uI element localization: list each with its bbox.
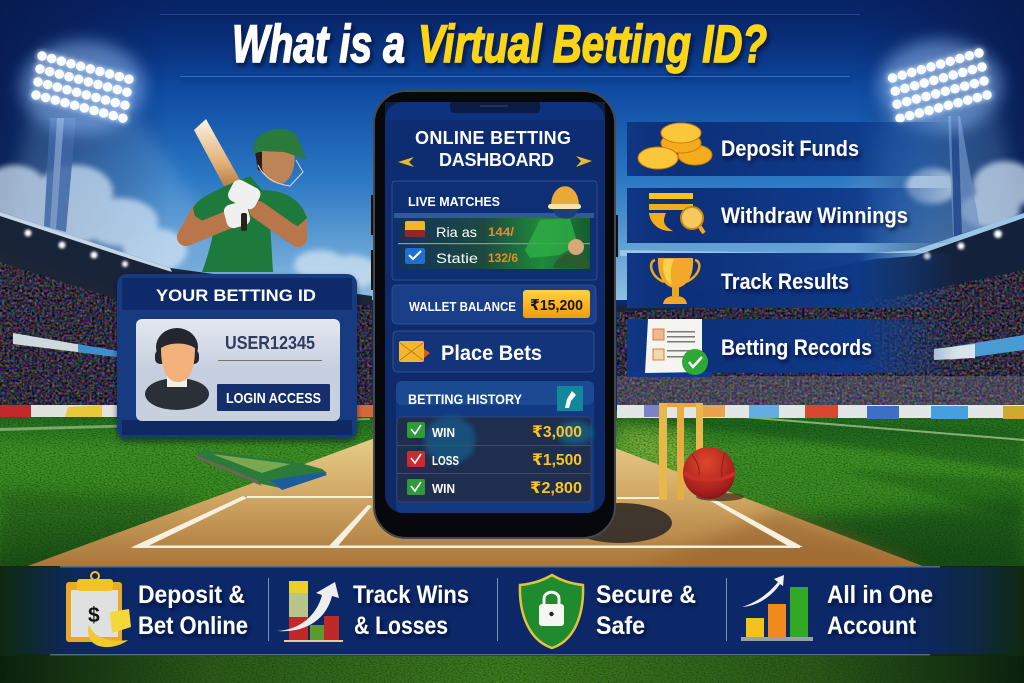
upper arms	[186, 212, 298, 238]
panel: live matches: LIVE MATCHES	[408, 194, 500, 209]
panel: betting records: Betting Records	[721, 335, 872, 360]
panel: deposit funds	[627, 122, 957, 176]
icon: clipboard	[66, 572, 131, 647]
hair	[255, 152, 268, 174]
phone shadow on pitch	[568, 503, 672, 543]
shirt	[193, 176, 307, 272]
sky background	[0, 0, 1024, 300]
icon: rupee and magnifier	[649, 193, 704, 233]
feature: secure and safe	[520, 575, 696, 648]
icon: envelope	[399, 341, 430, 362]
panel: track results	[627, 253, 957, 308]
row: win 2800	[407, 479, 582, 497]
right stand	[617, 213, 1024, 410]
helmet	[253, 129, 307, 159]
face	[262, 150, 295, 184]
panel: withdraw winnings: Withdraw Winnings	[721, 203, 908, 228]
batsman	[186, 119, 307, 272]
login button: LOGIN ACCESS	[226, 390, 321, 407]
icon: chart with arrow	[277, 581, 343, 642]
icon: player	[557, 386, 583, 411]
match rows: Statie	[436, 250, 478, 266]
bat on ground	[196, 450, 327, 490]
history table	[397, 416, 593, 502]
panel: betting history: BETTING HISTORY	[408, 391, 523, 407]
match rows: Ria as	[436, 224, 477, 240]
clouds	[0, 161, 1024, 289]
panel: betting records	[627, 319, 957, 377]
panel: wallet balance: WALLET BALANCE	[409, 299, 516, 314]
feature: secure and safe: Secure &	[596, 581, 696, 609]
feature: all in one account: Account	[827, 612, 917, 640]
dashboard heading: ONLINE BETTING	[415, 128, 571, 148]
grass field	[0, 410, 1024, 570]
match rows	[398, 218, 590, 269]
feature: secure and safe: Safe	[596, 612, 645, 640]
user name: USER12345	[225, 333, 315, 353]
ad boards	[0, 405, 1024, 419]
match rows: 132/6	[488, 251, 518, 265]
login button	[217, 384, 330, 411]
feature: deposit and bet online	[66, 572, 248, 647]
ID card	[136, 319, 340, 421]
row: win 2800: WIN	[432, 481, 455, 496]
gloves	[222, 177, 263, 230]
balance button	[523, 290, 590, 318]
bottom band backing	[0, 566, 1024, 656]
dashboard heading: DASHBOARD	[439, 150, 554, 170]
row: loss 1500: ₹1,500	[532, 452, 582, 469]
feature: deposit and bet online: Deposit &	[138, 581, 245, 609]
icon: shield with lock	[520, 575, 583, 648]
icon: helmet	[548, 186, 581, 219]
panel: wallet balance	[392, 285, 596, 324]
cricket pitch	[25, 438, 925, 567]
feature: all in one account	[741, 575, 933, 641]
team icon	[405, 248, 425, 264]
left stand	[0, 212, 372, 410]
icon: bat	[194, 119, 240, 190]
icon: growth bars	[741, 575, 813, 641]
cricket wickets	[659, 403, 703, 500]
feature: track wins and losses: & Losses	[354, 612, 448, 640]
forearms	[186, 210, 298, 238]
row: win 2800: ₹2,800	[530, 480, 582, 497]
grille	[258, 160, 303, 186]
panels: right side features	[627, 122, 957, 377]
row: win 3000: ₹3,000	[532, 424, 582, 441]
row: win 3000: WIN	[432, 425, 455, 440]
balance button: ₹15,200	[530, 297, 583, 314]
feature: deposit and bet online: Bet Online	[138, 612, 248, 640]
panel: live matches	[392, 181, 597, 280]
left floodlight	[0, 41, 230, 270]
player thumbnail	[553, 239, 589, 268]
icon: trophy	[651, 258, 699, 304]
panel: place bets	[393, 331, 594, 372]
bottom feature band	[0, 566, 1024, 656]
panel: withdraw winnings	[627, 188, 957, 243]
panel: deposit funds: Deposit Funds	[721, 136, 859, 161]
team icon	[405, 221, 425, 237]
icon: coins	[638, 123, 712, 169]
title	[160, 14, 860, 77]
right floodlight	[820, 40, 1024, 260]
match rows: 144/	[488, 225, 515, 239]
panel: your betting ID	[117, 274, 357, 438]
bottom grass	[0, 654, 1024, 683]
icon: gold arrows	[398, 156, 592, 167]
icon: user avatar	[145, 328, 209, 410]
bat handle	[241, 213, 247, 231]
panel: track results: Track Results	[721, 269, 849, 294]
row: win 3000	[407, 422, 582, 441]
feature: track wins and losses: Track Wins	[353, 581, 469, 609]
row: loss 1500: LOSS	[432, 453, 459, 468]
title: What is a	[232, 15, 405, 74]
icon: clipboard: $	[88, 604, 100, 627]
panel: betting history	[396, 381, 594, 513]
feature: all in one account: All in One	[827, 581, 933, 609]
heading: YOUR BETTING ID	[156, 286, 316, 305]
cricket ball	[683, 447, 744, 501]
phone	[371, 91, 618, 538]
feature: track wins and losses	[277, 581, 469, 642]
title: Virtual Betting ID?	[418, 15, 767, 74]
icon: document with check	[645, 319, 708, 375]
dashboard heading	[398, 128, 592, 170]
panel: place bets: Place Bets	[441, 342, 542, 365]
row: loss 1500	[407, 451, 582, 469]
